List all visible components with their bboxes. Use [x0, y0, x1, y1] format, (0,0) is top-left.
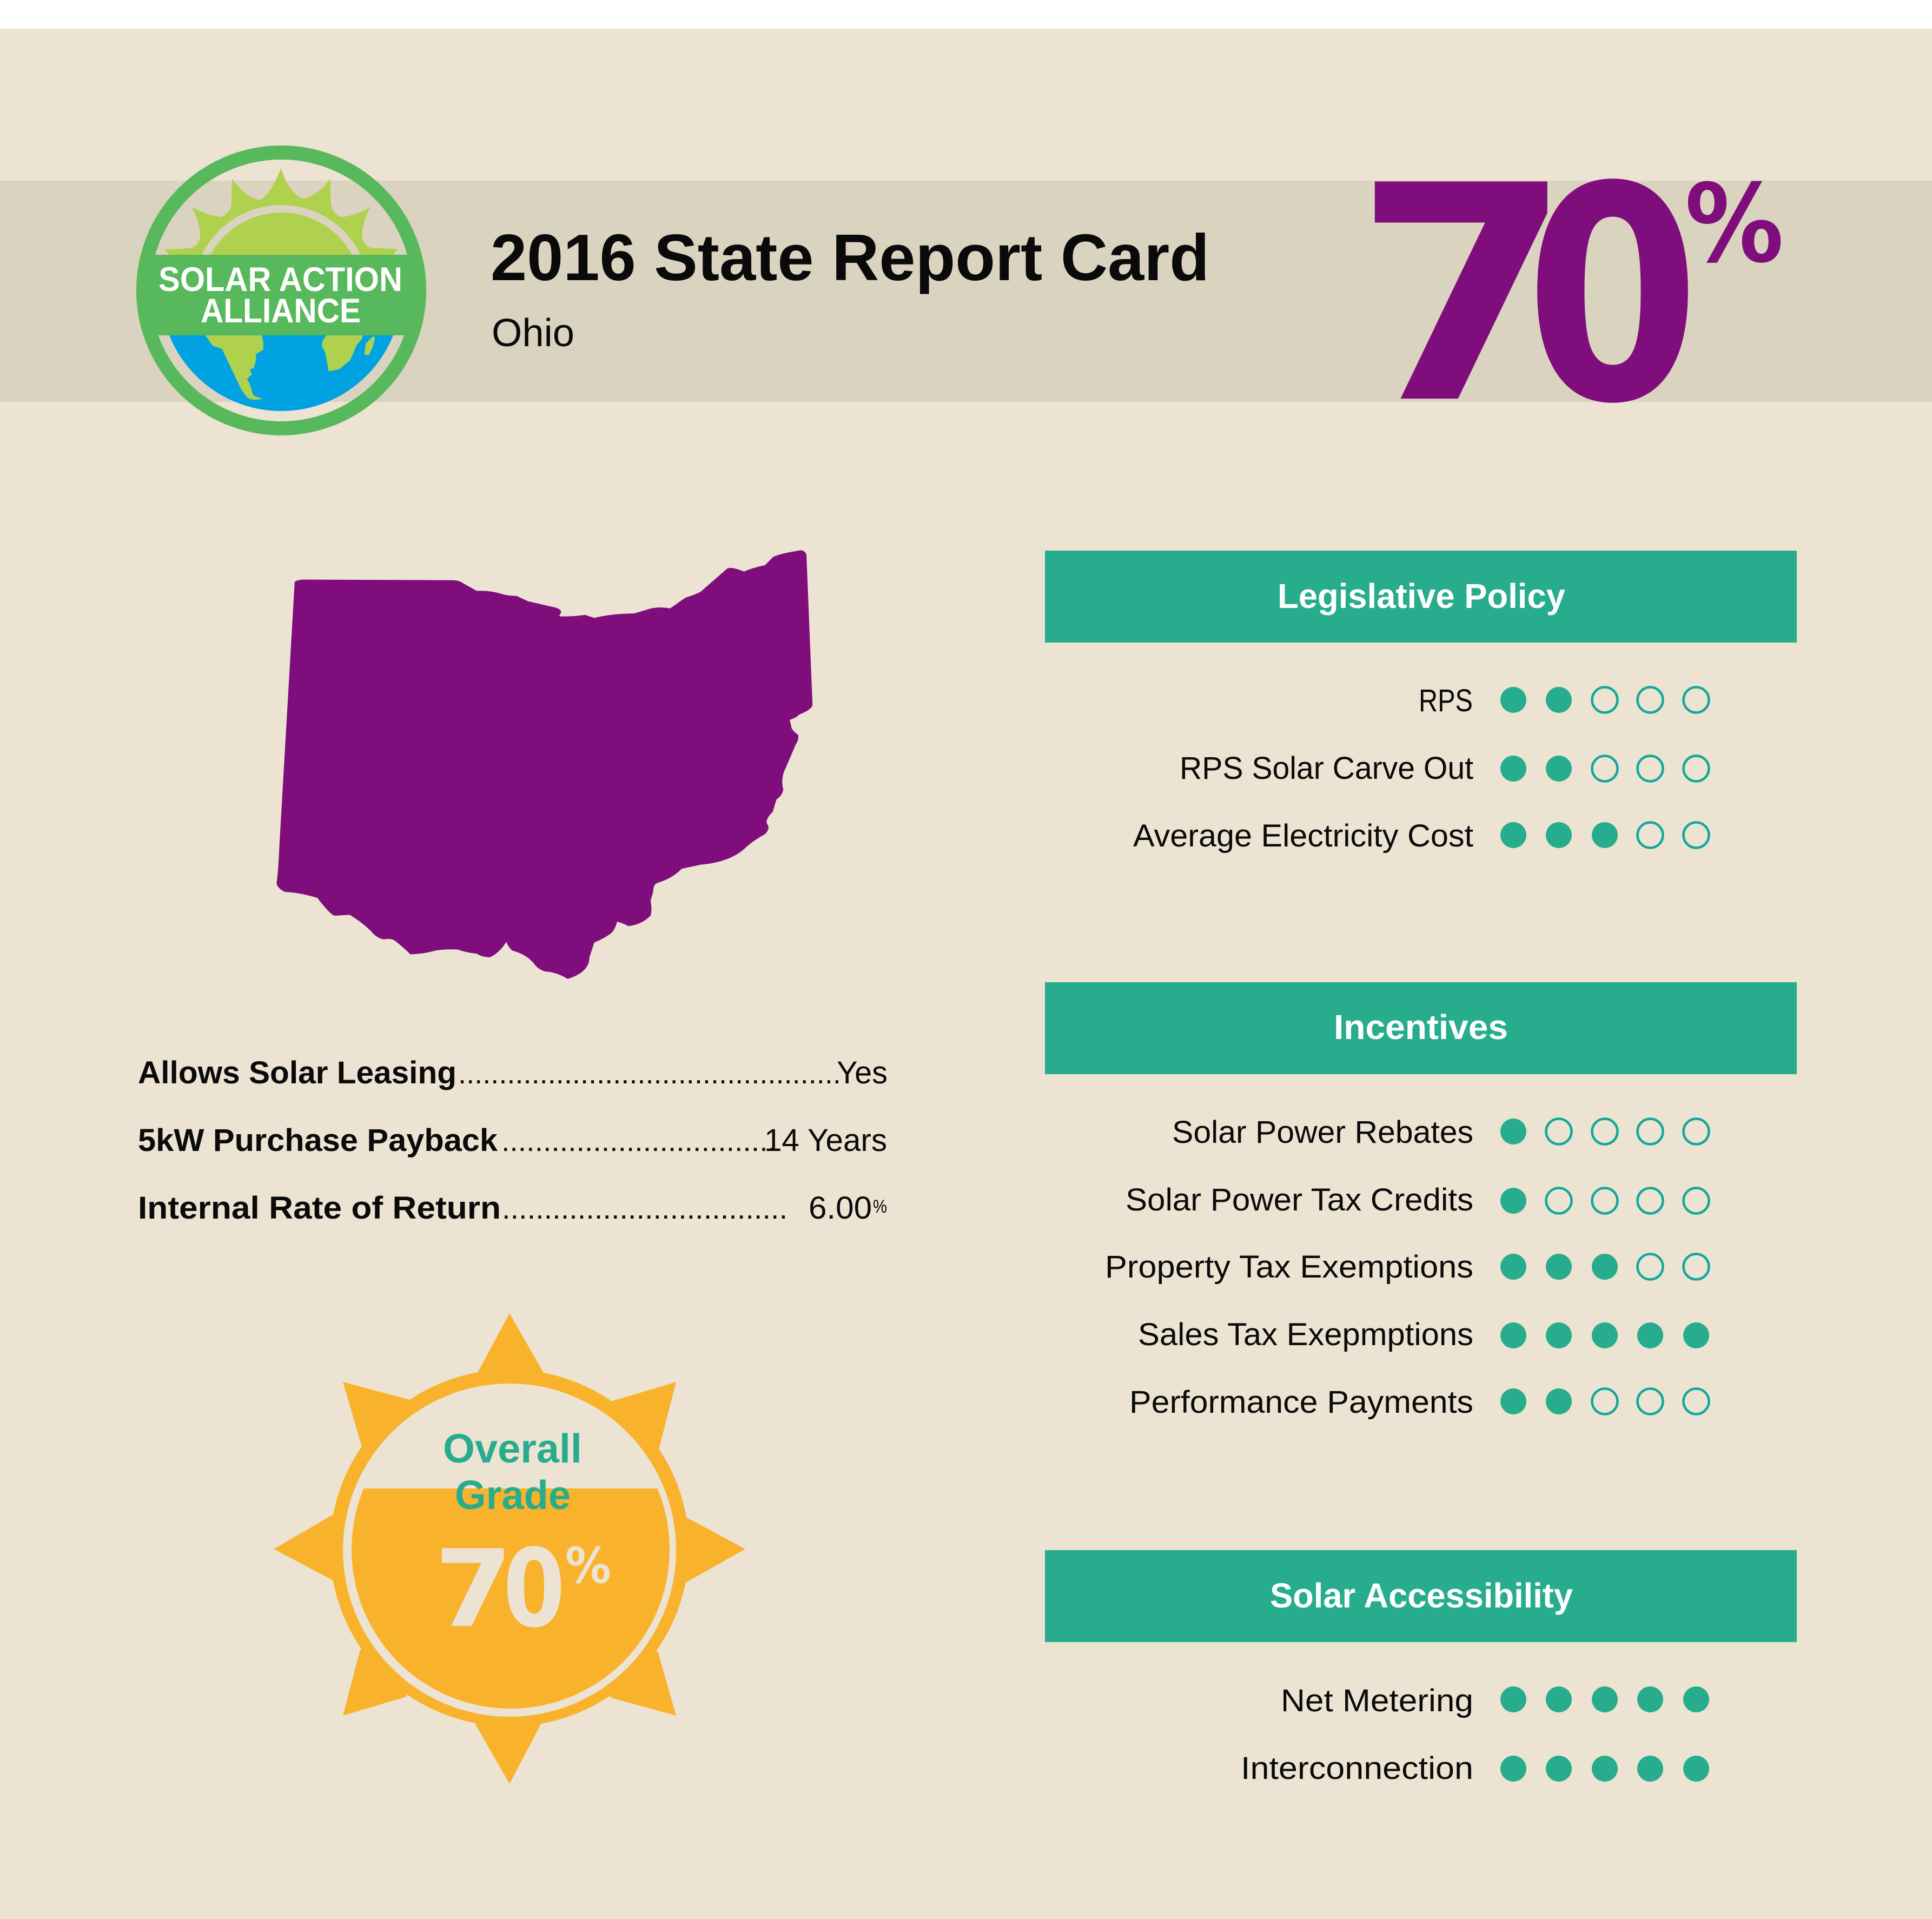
heading bar [1045, 1550, 1797, 1642]
row: average electricity cost: Average Electricity Cost [1133, 818, 1473, 853]
fact: allows solar leasing: Allows Solar Leasing [138, 1055, 456, 1090]
logo banner [135, 255, 427, 335]
row: solar power rebates [1172, 1115, 1709, 1150]
overall grade value [434, 1526, 611, 1651]
logo sun [164, 168, 398, 255]
row: solar power tax credits: Solar Power Tax Credits [1126, 1182, 1473, 1217]
row: RPS solar carve out [1180, 751, 1709, 786]
fact: 5kW purchase payback [138, 1123, 887, 1158]
map of Ohio [277, 550, 812, 979]
heading bar: Legislative Policy [1278, 577, 1565, 616]
row: net metering [1281, 1683, 1709, 1718]
overall grade label: Overall [443, 1426, 582, 1471]
logo: Solar Action Alliance [135, 153, 427, 428]
headline score 70%: 7 [1354, 122, 1572, 469]
row: performance payments [1129, 1385, 1709, 1420]
overall grade label: Grade [455, 1472, 571, 1518]
fact: internal rate of return: % [873, 1196, 887, 1217]
overall grade value: 7 [434, 1527, 513, 1651]
overall grade value: 0 [503, 1526, 565, 1651]
fact: 5kW purchase payback: ................................. [501, 1125, 776, 1157]
headline score 70%: % [1685, 161, 1784, 287]
title: 2016 State Report Card [491, 221, 1209, 294]
overall grade value: % [565, 1538, 611, 1594]
state name: Ohio [492, 312, 574, 355]
fact: internal rate of return: Internal Rate of Return [138, 1190, 501, 1226]
row: solar power rebates: Solar Power Rebates [1172, 1115, 1473, 1150]
headline score 70%: 0 [1525, 124, 1700, 469]
logo globe [169, 335, 393, 411]
fact: internal rate of return: 6.00 [809, 1190, 872, 1226]
row: RPS [1419, 683, 1709, 718]
row: net metering: Net Metering [1281, 1683, 1473, 1718]
row: property tax exemptions [1105, 1249, 1709, 1285]
row: performance payments: Performance Payments [1129, 1385, 1473, 1420]
heading bar [1045, 982, 1797, 1074]
overall grade sun badge [274, 1313, 745, 1784]
sun rays [274, 1313, 745, 1784]
row: property tax exemptions: Property Tax Exemptions [1105, 1249, 1473, 1285]
logo text: SOLAR ACTION [158, 261, 402, 299]
panel: solar accessibility [1045, 1550, 1797, 1786]
panel: incentives [1045, 982, 1797, 1420]
row: interconnection: Interconnection [1241, 1751, 1473, 1786]
heading bar: Incentives [1334, 1008, 1508, 1047]
heading bar [1045, 551, 1797, 643]
header band [0, 145, 1932, 435]
fact: allows solar leasing: Yes [837, 1055, 888, 1090]
row: RPS solar carve out: RPS Solar Carve Out [1180, 751, 1473, 786]
fact: internal rate of return: .................................. [502, 1193, 788, 1225]
row: solar power tax credits [1126, 1182, 1709, 1217]
logo ring [143, 153, 419, 428]
fact: 5kW purchase payback: 14 Years [764, 1123, 887, 1158]
panel: legislative policy [1045, 551, 1797, 853]
logo text: ALLIANCE [201, 292, 361, 330]
fact: allows solar leasing: ............................................... [458, 1057, 841, 1090]
row: sales tax exepmptions: Sales Tax Exepmptions [1138, 1317, 1473, 1352]
logo text [158, 261, 402, 330]
fact: internal rate of return [138, 1190, 887, 1226]
outer ring [330, 1369, 689, 1726]
row: interconnection [1241, 1751, 1709, 1786]
headline score 70% [1354, 122, 1784, 469]
row: sales tax exepmptions [1138, 1317, 1709, 1352]
row: RPS: RPS [1419, 683, 1473, 718]
fact: allows solar leasing [138, 1055, 888, 1090]
fact: 5kW purchase payback: 5kW Purchase Payback [138, 1123, 498, 1158]
row: average electricity cost [1133, 818, 1709, 853]
state facts list [138, 1055, 888, 1226]
overall grade label [443, 1426, 582, 1518]
heading bar: Solar Accessibility [1270, 1576, 1573, 1615]
half-filled disc [352, 1488, 670, 1709]
